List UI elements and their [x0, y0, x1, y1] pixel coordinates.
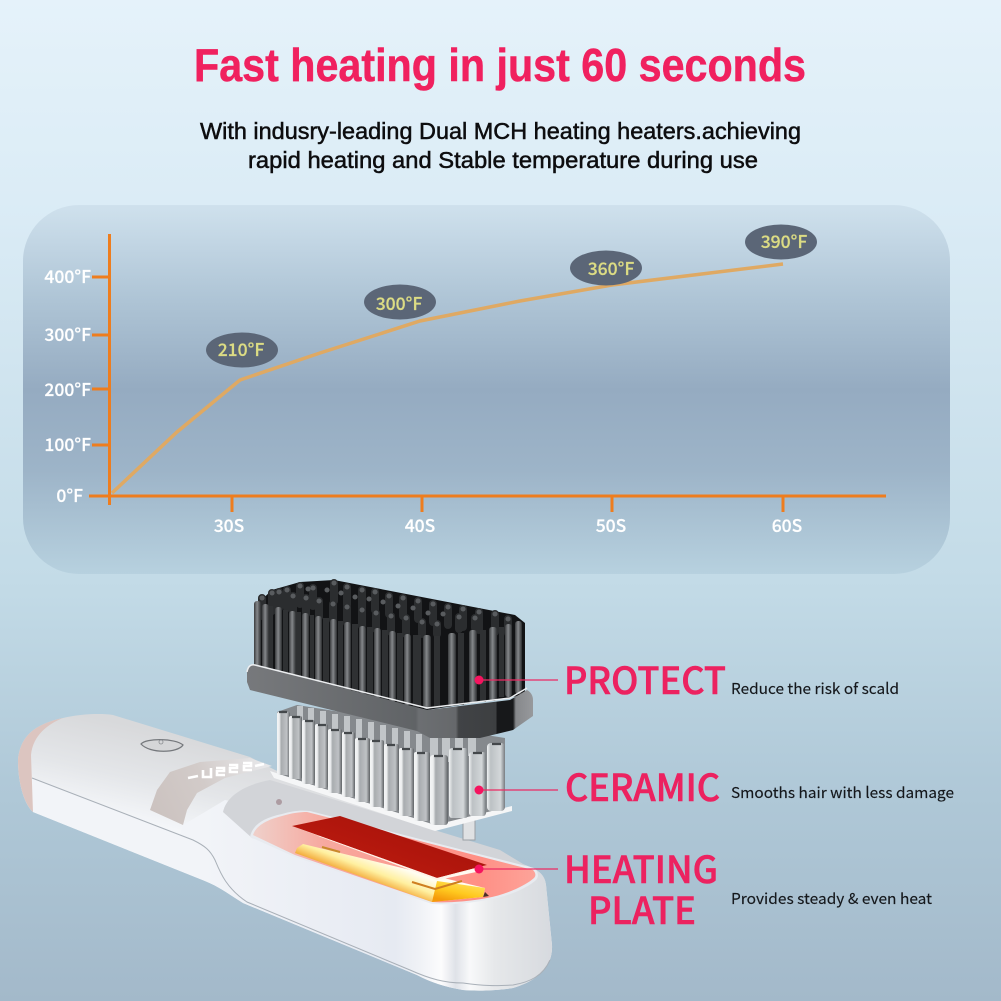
x axis labels: 60S	[772, 513, 802, 538]
base plate	[270, 771, 512, 831]
base ring	[247, 665, 533, 738]
bristle necks	[262, 583, 508, 634]
x axis with ticks	[89, 496, 886, 512]
red heating plate	[292, 816, 487, 878]
y axis with ticks	[92, 234, 110, 505]
display band	[150, 758, 272, 825]
heading: heating plate: HEATING	[564, 840, 718, 894]
bristle tips	[262, 583, 508, 624]
grey recess	[223, 780, 533, 870]
x axis labels: 40S	[405, 513, 435, 538]
y axis labels: 400°F	[44, 264, 91, 289]
inner shadow	[483, 892, 489, 897]
heading: protect: PROTECT	[564, 651, 726, 705]
white glow	[318, 824, 481, 880]
power button	[141, 740, 183, 751]
description: ceramic: Smooths hair with less damage	[731, 782, 954, 803]
subtitle	[200, 118, 801, 173]
callout: 210°F	[206, 332, 278, 368]
heading: ceramic: CERAMIC	[565, 758, 720, 812]
callout: 390°F: 390°F	[761, 229, 807, 254]
callout: heating plate	[474, 840, 932, 935]
callout: 360°F	[570, 250, 642, 286]
well rim	[250, 811, 538, 904]
front bristles	[254, 601, 522, 709]
title: Fast heating in just 60 seconds	[194, 39, 806, 91]
description: heating plate: Provides steady & even heat	[731, 888, 932, 909]
glowing yellow heater	[295, 844, 485, 902]
y axis labels: 0°F	[56, 483, 83, 508]
subtitle: rapid heating and Stable temperature during use	[248, 147, 758, 173]
heading: heating plate: PLATE	[588, 881, 696, 935]
callout: 390°F	[745, 224, 817, 260]
illustration: hair straightener brush body	[18, 714, 552, 991]
front rods	[277, 712, 448, 825]
illustration: ceramic comb	[270, 705, 512, 840]
ceramic pin	[463, 820, 475, 840]
callout: ceramic	[474, 758, 954, 812]
callout: 210°F: 210°F	[218, 337, 264, 362]
x axis labels: 30S	[214, 513, 244, 538]
glowing red recess	[253, 812, 535, 902]
callout: 360°F: 360°F	[588, 256, 634, 281]
rod caps	[279, 712, 501, 756]
callout: protect	[474, 651, 899, 705]
right rods	[449, 743, 505, 818]
heading: heating plate	[564, 840, 718, 935]
y axis labels: 300°F	[44, 322, 91, 347]
cap shade	[18, 718, 63, 812]
base ring rim	[247, 665, 527, 708]
y axis labels: 100°F	[44, 432, 91, 457]
callout: 300°F	[364, 284, 436, 320]
x axis labels	[214, 513, 802, 538]
seam lines	[32, 778, 550, 986]
subtitle: With indusry-leading Dual MCH heating heaters.achieving	[200, 118, 801, 144]
second row bristles	[268, 606, 504, 708]
panel: temperature chart	[23, 205, 950, 574]
rear rods	[277, 705, 505, 827]
heating curve	[112, 264, 783, 493]
head and lower body	[32, 778, 552, 991]
y axis labels	[44, 264, 91, 508]
y axis labels: 200°F	[44, 377, 91, 402]
bristle mass	[255, 580, 525, 710]
x axis labels: 50S	[596, 513, 626, 538]
illustration: protective bristle cover	[247, 580, 533, 738]
callout: 300°F: 300°F	[376, 291, 422, 316]
description: protect: Reduce the risk of scald	[731, 678, 899, 699]
